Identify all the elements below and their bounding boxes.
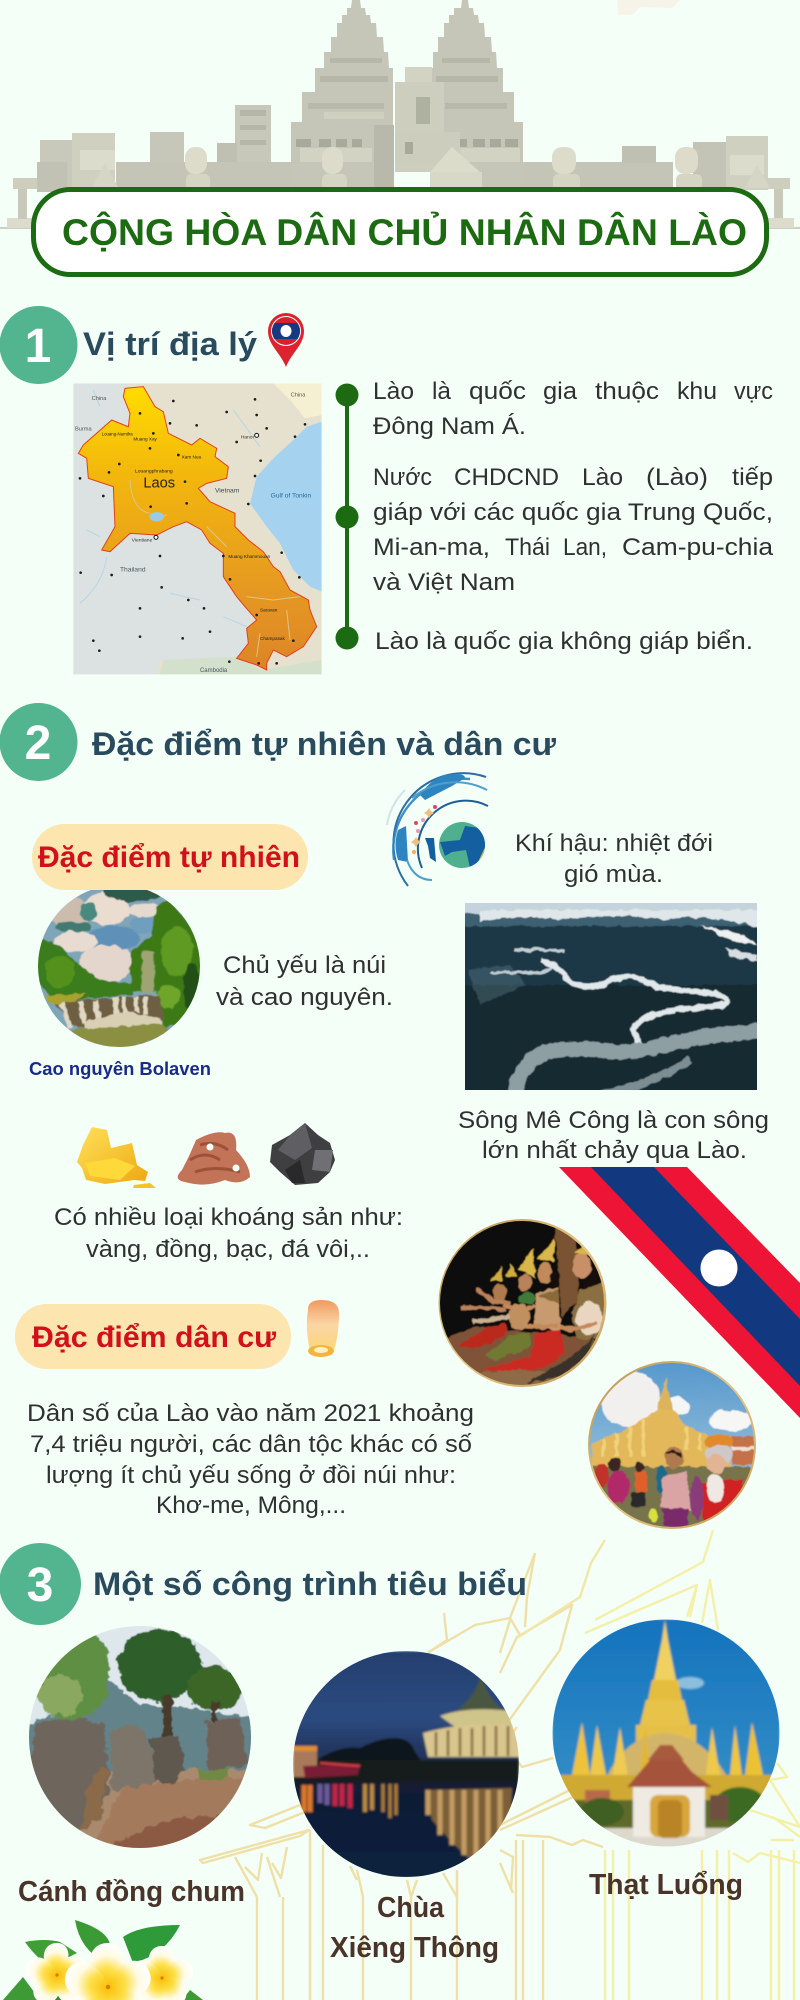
icon: copper ore <box>178 1132 250 1185</box>
illustration: temple skyline <box>0 0 800 229</box>
map of Laos: Burma <box>75 427 93 433</box>
photo: Apsara dancers <box>437 1217 610 1390</box>
text: borders line 2: giáp với các quốc gia Trung Quốc, <box>373 499 773 526</box>
Laos territory <box>78 387 317 670</box>
label: Xieng Thong temple: Chùa <box>377 1892 445 1924</box>
section 3 heading: Một số công trình tiêu biểu <box>93 1566 527 1602</box>
text: borders: Lào <box>582 464 623 491</box>
text: borders line 3: Thái <box>505 534 550 561</box>
icon: map pin with Lao flag <box>268 313 304 367</box>
map of Laos: Muang Khammouan <box>228 554 271 559</box>
text: location: Lào <box>373 378 414 405</box>
label: Plain of Jars: Cánh đồng chum <box>18 1876 245 1908</box>
section 2 number badge: 2 <box>25 717 51 770</box>
text: borders line 3: Lan, <box>563 534 607 561</box>
text: location: gia <box>543 378 578 405</box>
map of Laos: Thailand <box>120 567 146 574</box>
text: population: Dân số của Lào vào năm 2021 khoảng <box>27 1400 474 1427</box>
section 3 number badge <box>0 1543 81 1625</box>
timeline <box>336 384 358 650</box>
section 1 heading: Vị trí địa lý <box>83 326 257 362</box>
icon: globe with climate arcs <box>387 773 490 886</box>
text: climate: Khí hậu: nhiệt đới <box>515 830 713 857</box>
text: location line 2: Đông Nam Á. <box>373 413 526 440</box>
label: Xieng Thong temple: Xiêng Thông <box>330 1932 499 1964</box>
text: minerals: Có nhiều loại khoáng sản như: <box>54 1204 403 1231</box>
map of Laos: Louangphrabang <box>135 469 173 475</box>
text: population line 4: Khơ-me, Mông,... <box>156 1492 346 1519</box>
illustration: plumeria flowers <box>3 1920 203 2000</box>
section 2 number badge <box>0 703 78 781</box>
decorative temple outline <box>200 1530 800 2000</box>
map of Laos: Champasak <box>260 636 286 641</box>
map of Laos: China <box>92 396 107 402</box>
text: monsoon: gió mùa. <box>564 861 663 888</box>
icon: dark rock <box>270 1123 335 1185</box>
text: no sea: Lào là quốc gia không giáp biển. <box>375 628 753 655</box>
timeline dot 3 <box>336 626 358 650</box>
text: location: khu <box>677 378 717 405</box>
map of Laos <box>73 383 322 674</box>
illustration: Lao flag ribbon <box>559 1167 800 1418</box>
map of Laos: Gulf of Tonkin <box>271 492 312 499</box>
section 2 heading: Đặc điểm tự nhiên và dân cư <box>92 726 557 762</box>
dancer 4 <box>582 1256 601 1288</box>
map of Laos: Xam Nua <box>182 455 201 460</box>
text: population line 2: 7,4 triệu người, các dân tộc khác có số <box>30 1431 472 1458</box>
pill: natural features <box>32 824 308 890</box>
text: minerals line 2: vàng, đồng, bạc, đá vôi,.. <box>86 1236 370 1263</box>
text: Mekong line 2: lớn nhất chảy qua Lào. <box>482 1137 747 1164</box>
text: borders: (Lào) <box>646 464 708 491</box>
map of Laos: Muang Xay <box>133 437 158 442</box>
label: That Luang: Thạt Luổng <box>589 1869 743 1901</box>
section 3 number badge: 3 <box>27 1559 53 1612</box>
map of Laos: Vietnam <box>215 488 240 495</box>
photo: Xieng Thong temple at night <box>293 1651 519 1878</box>
map of Laos: Vientiane <box>132 538 153 544</box>
text: borders: CHDCND <box>454 464 559 491</box>
text: borders line 3: Cam-pu-chia <box>622 534 774 561</box>
photo: festival at That Luang <box>587 1360 757 1533</box>
section 1 number badge: 1 <box>25 320 51 373</box>
title banner <box>34 190 766 274</box>
section 1 number badge <box>0 306 78 384</box>
text: location: quốc <box>469 378 526 405</box>
timeline dot 2 <box>336 506 358 528</box>
text: borders line 3: Mi-an-ma, <box>373 534 490 561</box>
pill: natural features: Đặc điểm tự nhiên <box>38 841 300 874</box>
text: population line 3: lượng ít chủ yếu sống ở đồi núi như: <box>46 1462 456 1489</box>
text: Mekong: Sông Mê Công là con sông <box>458 1107 769 1134</box>
icon: sky lantern <box>307 1300 339 1357</box>
map of Laos: Saravan <box>260 607 278 612</box>
dancer 2 <box>517 1248 535 1278</box>
map of Laos: Laos <box>143 476 175 492</box>
dancer 1 <box>490 1267 502 1282</box>
text: borders: Nước <box>373 464 432 491</box>
timeline dot 1 <box>336 384 358 406</box>
text: location: là <box>432 378 452 405</box>
text: mountains: Chủ yếu là núi <box>223 952 386 979</box>
caption: Bolaven: Cao nguyên Bolaven <box>29 1059 211 1079</box>
text: plateaus: và cao nguyên. <box>216 984 393 1011</box>
text: location: thuộc <box>595 378 659 405</box>
pill: population <box>15 1304 291 1369</box>
map of Laos: Hanoi <box>241 434 254 440</box>
map of Laos: China <box>291 393 306 399</box>
title text: CỘNG HÒA DÂN CHỦ NHÂN DÂN LÀO <box>62 211 747 253</box>
text: borders line 4: và Việt Nam <box>373 569 515 596</box>
dancer 3 <box>537 1238 555 1262</box>
photo: Bolaven waterfall <box>38 890 200 1047</box>
icon: gold nugget <box>77 1127 156 1188</box>
decorative pale shape top right <box>617 0 680 15</box>
map of Laos: Cambodia <box>200 668 228 674</box>
label: Xieng Thong temple <box>330 1892 499 1964</box>
photo: Mekong river <box>460 898 762 1095</box>
photo: Pha That Luang <box>552 1619 780 1848</box>
text: location: vực <box>734 378 773 405</box>
photo: Plain of Jars <box>29 1626 251 1848</box>
text: borders: tiếp <box>732 464 773 491</box>
pill: population: Đặc điểm dân cư <box>32 1321 276 1354</box>
map of Laos: Louang-Namtha <box>102 431 133 436</box>
